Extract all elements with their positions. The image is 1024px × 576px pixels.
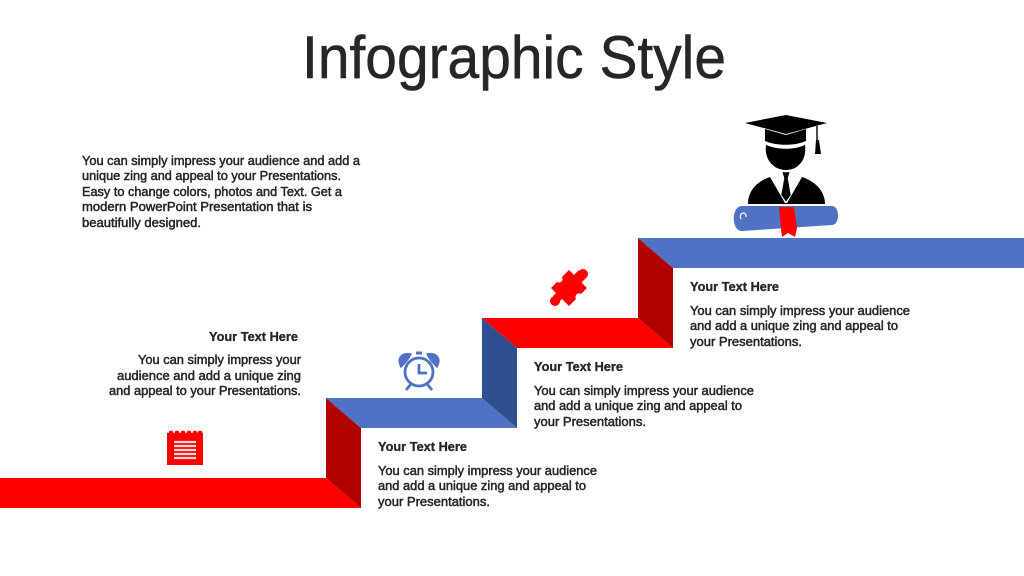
body: and appeal to your Presentations. <box>109 383 301 398</box>
shoulders and tie <box>748 177 825 204</box>
step 1 dark red riser <box>326 398 361 508</box>
head <box>766 145 805 170</box>
staircase <box>0 238 1024 508</box>
body: You can simply impress your audience <box>690 303 910 318</box>
body <box>690 303 910 349</box>
step 3 dark red riser <box>638 238 673 348</box>
intro text block: modern PowerPoint Presentation that is <box>82 199 312 214</box>
heading: Your Text Here <box>378 439 467 454</box>
body: You can simply impress your audience <box>378 463 597 478</box>
heading: Your Text Here <box>534 359 623 374</box>
step 2 blue tread <box>326 398 517 428</box>
icon: graduate with diploma <box>734 115 838 237</box>
heading: Your Text Here <box>690 279 779 294</box>
intro text block <box>82 153 361 230</box>
body <box>378 463 597 509</box>
diploma ribbon <box>779 207 797 237</box>
body: your Presentations. <box>690 334 802 349</box>
step 3 red tread <box>482 318 673 348</box>
body: and add a unique zing and appeal to <box>534 398 742 413</box>
body: your Presentations. <box>534 414 646 429</box>
body <box>534 383 754 429</box>
intro text block: Easy to change colors, photos and Text. Get a <box>82 184 343 199</box>
intro text block: unique zing and appeal to your Presentations. <box>82 168 341 183</box>
step 1 red tread <box>0 478 361 508</box>
step 2 dark blue riser <box>482 318 517 428</box>
graduation cap <box>745 115 827 134</box>
icon: notepad <box>167 431 203 465</box>
body: and add a unique zing and appeal to <box>378 478 586 493</box>
body: audience and add a unique zing <box>117 368 301 383</box>
body: You can simply impress your <box>138 352 302 367</box>
body: You can simply impress your audience <box>534 383 754 398</box>
title: Infographic Style <box>302 24 726 91</box>
icon: puzzle piece <box>550 269 588 306</box>
intro text block: beautifully designed. <box>82 215 201 230</box>
body <box>109 352 302 398</box>
icon: alarm clock <box>399 353 439 390</box>
text block: step 4 <box>690 279 910 349</box>
body: your Presentations. <box>378 494 490 509</box>
body: and add a unique zing and appeal to <box>690 318 898 333</box>
text block: step 2 <box>378 439 597 509</box>
step 4 blue tread <box>638 238 1024 268</box>
diploma scroll <box>734 206 838 231</box>
text block: step 1 <box>109 329 302 398</box>
text block: step 3 <box>534 359 754 429</box>
heading: Your Text Here <box>209 329 298 344</box>
intro text block: You can simply impress your audience and add a <box>82 153 361 168</box>
